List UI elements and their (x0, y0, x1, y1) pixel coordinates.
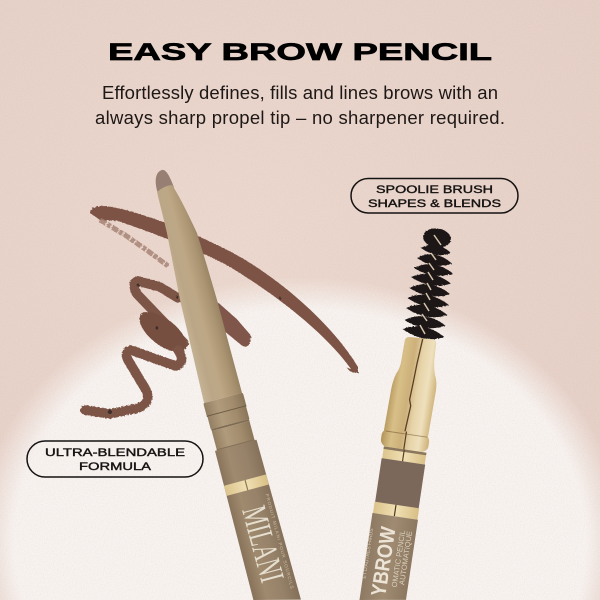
description text: always sharp propel tip – no sharpener required. (95, 107, 505, 128)
gold band upper (382, 446, 426, 465)
brow pencil swatch scribble (85, 206, 358, 414)
callout: spoolie brush (351, 178, 518, 213)
title: EASY BROW PENCIL (108, 39, 492, 66)
ferrule seam (405, 338, 423, 433)
lower barrel (214, 439, 301, 600)
callout: spoolie brush: SHAPES & BLENDS (368, 198, 501, 210)
product name text: YBROW (367, 525, 400, 598)
product descriptor text: AUTOMATIQUE (397, 530, 414, 586)
left pencil: propel tip (140, 164, 301, 600)
pencil label barrel (359, 513, 418, 600)
gold ferrule (383, 334, 443, 442)
barrel collar rings (203, 393, 256, 451)
taupe shade band (375, 458, 425, 509)
pencil barrel (147, 181, 242, 403)
ferrule rim (380, 428, 430, 453)
right pencil: spoolie end (357, 227, 453, 600)
callout: ultra-blendable formula (27, 441, 203, 477)
small side text: PRODUIT MILANI POUR SOURCILS (264, 493, 295, 589)
callout: ultra-blendable formula: FORMULA (79, 461, 152, 473)
callout: spoolie brush: SPOOLIE BRUSH (376, 184, 493, 196)
small side text: ET D'AUTRES FARDS (362, 527, 375, 579)
description text (95, 82, 505, 128)
spoolie brush (402, 227, 453, 339)
gold band lower (373, 502, 419, 520)
gold band (224, 474, 269, 496)
product descriptor text: OMATIC PENCIL (390, 529, 407, 588)
pencil lead tip (152, 168, 175, 195)
description text: Effortlessly defines, fills and lines brows with an (102, 82, 498, 103)
callout: ultra-blendable formula: ULTRA-BLENDABLE (45, 447, 185, 459)
